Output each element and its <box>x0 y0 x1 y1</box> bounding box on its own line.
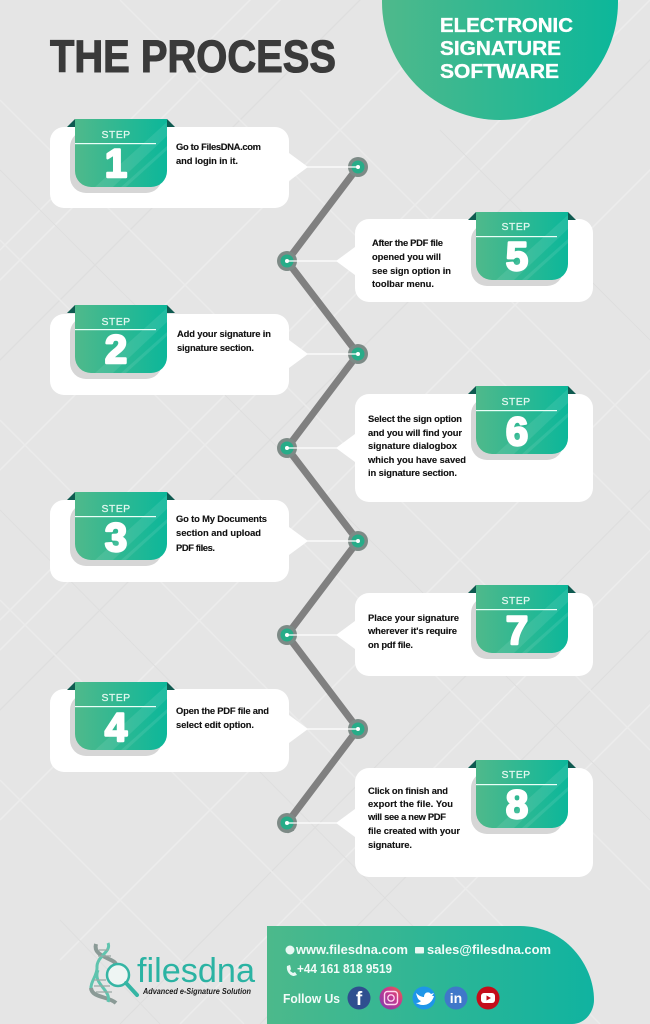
email: sales@filesdna.com <box>427 942 551 957</box>
logo <box>91 943 255 1003</box>
icon: facebook: f <box>356 989 363 1010</box>
text: step 7 <box>367 612 459 650</box>
panel: step 3: 3 <box>105 516 127 560</box>
icon: globe <box>286 946 294 954</box>
header text <box>440 15 573 83</box>
text: step 6: signature dialogbox <box>368 440 458 451</box>
text: step 5: see sign option in <box>372 265 451 276</box>
logo tagline: Advanced e-Signature Solution <box>142 987 251 996</box>
panel: step 6: STEP <box>501 396 531 408</box>
text: step 2: Add your signature in <box>177 328 271 339</box>
panel: step 4: STEP <box>101 692 131 704</box>
panel: step 2: 2 <box>105 328 127 372</box>
text: step 6 <box>367 413 466 478</box>
text: step 6: and you will find your <box>368 427 462 438</box>
panel: step 4 <box>50 682 308 772</box>
panel: step 5: 5 <box>506 235 528 279</box>
text: step 3: section and upload <box>176 527 261 538</box>
panel: step 3: STEP <box>101 503 131 515</box>
panel: step 5: STEP <box>501 221 531 233</box>
follow us label: Follow Us <box>283 991 340 1006</box>
icon: instagram <box>380 986 402 1010</box>
panel: step 8: STEP <box>501 769 531 781</box>
text: step 1: and login in it. <box>176 155 238 166</box>
icon: dna helix with magnifier <box>91 943 137 1003</box>
text: step 8: will see a new PDF <box>367 811 446 822</box>
header circle <box>382 0 618 120</box>
header text: SIGNATURE <box>440 38 561 60</box>
panel: step 1: STEP <box>101 129 131 141</box>
panel: step 1 <box>50 119 308 208</box>
text: step 6: which you have saved <box>367 454 466 465</box>
logo wordmark: filesdna <box>137 952 255 990</box>
text: step 8: signature. <box>368 839 412 850</box>
text: step 1 <box>176 141 261 166</box>
panel: step 1: 1 <box>105 142 127 186</box>
text: step 5 <box>372 237 451 289</box>
icon: twitter <box>412 986 436 1010</box>
header text: SOFTWARE <box>440 61 559 83</box>
text: step 4: Open the PDF file and <box>176 705 269 716</box>
text: step 5: After the PDF file <box>372 237 443 248</box>
header text: ELECTRONIC <box>440 15 573 37</box>
text: step 3: Go to My Documents <box>176 513 267 524</box>
panel: step 8: 8 <box>506 783 528 827</box>
panel: step 5 <box>336 212 593 302</box>
text: step 4: select edit option. <box>176 719 254 730</box>
icon: phone <box>287 965 297 976</box>
text: step 1: Go to FilesDNA.com <box>176 141 261 152</box>
panel: step 8 <box>336 760 593 877</box>
text: step 7: Place your signature <box>368 612 459 623</box>
text: step 2: signature section. <box>177 342 254 353</box>
text: step 2 <box>177 328 271 353</box>
icon: youtube <box>476 986 500 1010</box>
text: step 4 <box>176 705 269 730</box>
text: step 5: opened you will <box>372 251 441 262</box>
text: step 6: Select the sign option <box>368 413 462 424</box>
panel: step 2: STEP <box>101 316 131 328</box>
text: step 8: file created with your <box>368 825 460 836</box>
text: step 7: wherever it's require <box>367 625 457 636</box>
panel: step 7 <box>336 585 593 676</box>
panel: step 2 <box>50 305 308 395</box>
title: THE PROCESS <box>50 31 336 82</box>
panel: step 7: STEP <box>501 595 531 607</box>
text: step 6: in signature section. <box>368 467 457 478</box>
timeline nodes <box>277 157 368 833</box>
icon: facebook <box>348 986 370 1010</box>
panel: step 6: 6 <box>506 410 528 454</box>
panel: step 7: 7 <box>506 609 528 653</box>
icon: mail <box>415 947 424 954</box>
phone number: +44 161 818 9519 <box>297 961 392 976</box>
panel: step 6 <box>336 386 593 502</box>
panel: step 3 <box>50 492 308 582</box>
website: www.filesdna.com <box>295 942 408 957</box>
text: step 5: toolbar menu. <box>372 278 434 289</box>
panel: footer contact <box>267 926 594 1024</box>
text: step 3: PDF files. <box>176 542 215 553</box>
text: step 3 <box>176 513 267 553</box>
text: step 8 <box>367 785 460 850</box>
icon: linkedin: in <box>450 990 462 1006</box>
text: step 8: export the file. You <box>368 798 453 809</box>
text: step 7: on pdf file. <box>368 639 413 650</box>
panel: step 4: 4 <box>105 706 128 750</box>
icon: linkedin <box>444 986 468 1010</box>
text: step 8: Click on finish and <box>368 785 448 796</box>
zigzag timeline connector <box>287 167 358 832</box>
